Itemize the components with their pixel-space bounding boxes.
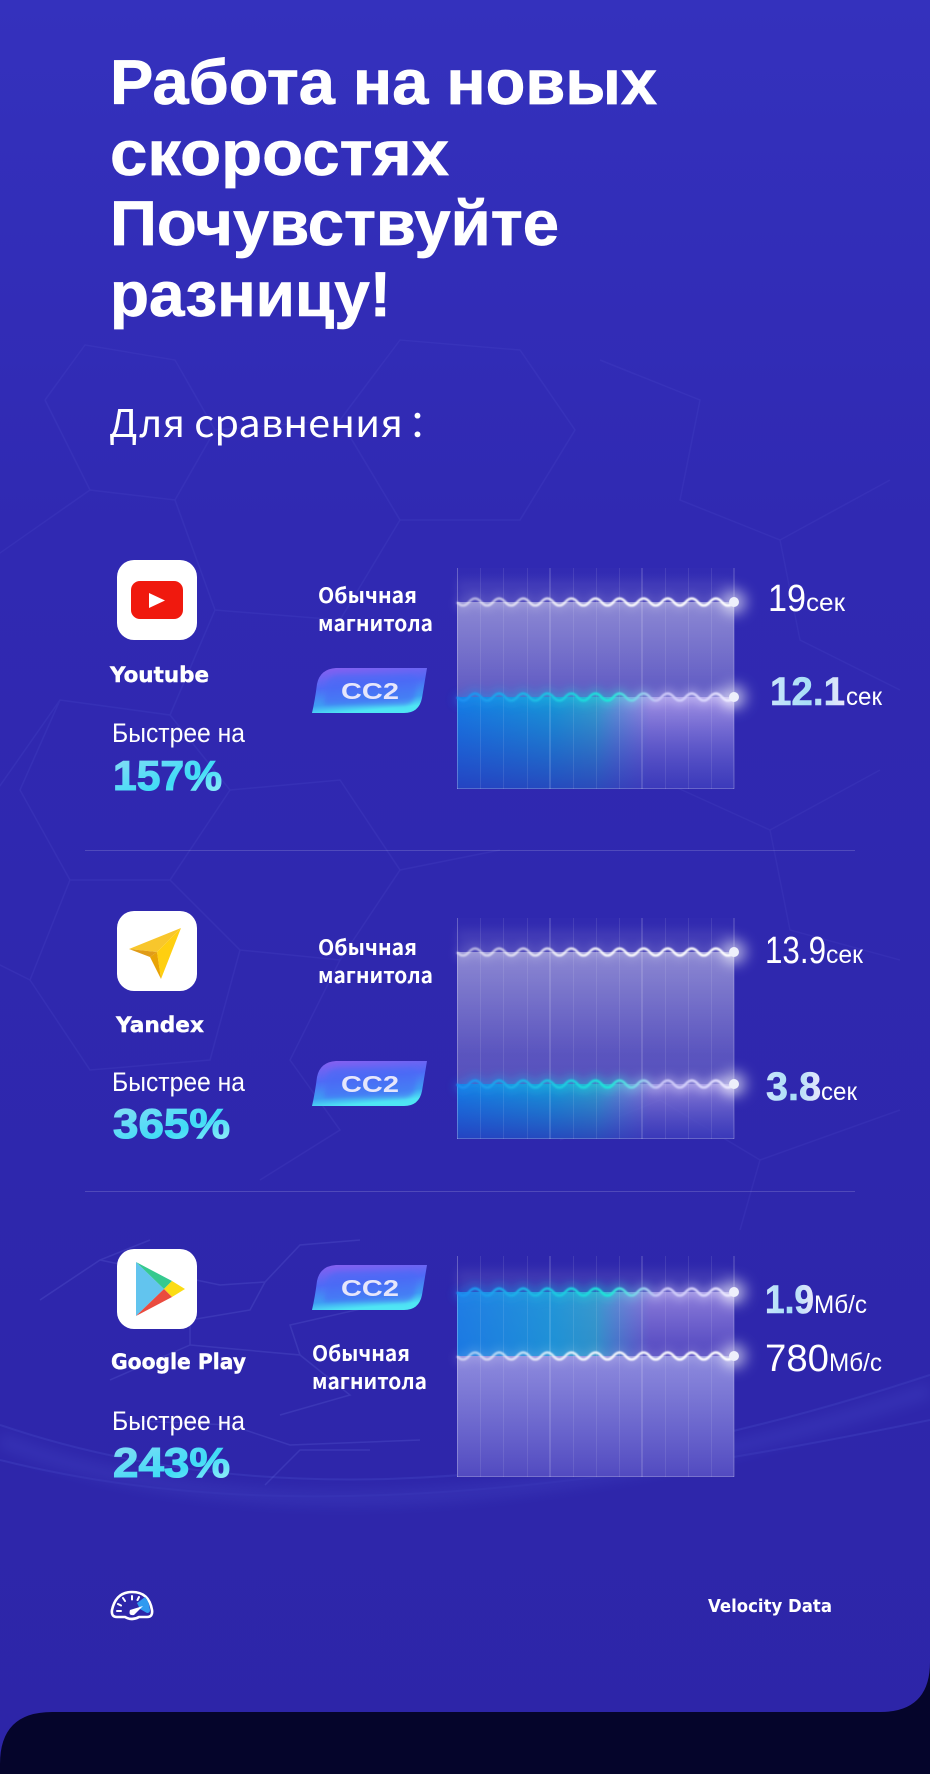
title bbox=[110, 48, 657, 330]
label: regular head unit: магнитола bbox=[318, 608, 433, 638]
value: regular: 13.9 bbox=[765, 930, 826, 972]
value: regular bbox=[765, 1338, 882, 1380]
value: CC2 bbox=[765, 1278, 867, 1322]
value: regular: Мб/с bbox=[829, 1349, 882, 1377]
label: regular head unit: магнитола bbox=[318, 960, 433, 990]
panel: yandex bbox=[112, 911, 864, 1147]
value: CC2: сек bbox=[821, 1078, 858, 1106]
badge: CC2: CC2 bbox=[341, 1275, 399, 1301]
faster label: Быстрее на bbox=[112, 1067, 246, 1097]
brand text: Velocity Data bbox=[708, 1596, 832, 1617]
chart: youtube bbox=[457, 568, 746, 789]
icon: google play bbox=[117, 1249, 197, 1329]
badge: CC2: CC2 bbox=[341, 1071, 399, 1097]
icon: yandex bbox=[117, 911, 197, 991]
percentage: 243% bbox=[113, 1439, 230, 1486]
background hexagon network bbox=[0, 340, 900, 1230]
badge: CC2: CC2 bbox=[341, 678, 399, 704]
icon: youtube bbox=[117, 560, 197, 640]
label: regular head unit: Обычная bbox=[312, 1338, 410, 1368]
app name: Yandex bbox=[115, 1013, 204, 1037]
value: CC2 bbox=[766, 1065, 858, 1109]
value: regular: сек bbox=[826, 941, 864, 969]
value: CC2: 12.1 bbox=[770, 670, 845, 714]
value: CC2: сек bbox=[846, 683, 883, 711]
badge: CC2 bbox=[312, 1061, 427, 1106]
value: regular: 19 bbox=[768, 578, 806, 620]
label: regular head unit bbox=[318, 580, 433, 638]
value: CC2 bbox=[770, 670, 883, 714]
title: Почувствуйте bbox=[110, 189, 559, 259]
value: CC2: 1.9 bbox=[765, 1278, 814, 1322]
chart: yandex bbox=[457, 918, 746, 1139]
label: regular head unit: магнитола bbox=[312, 1366, 427, 1396]
value: CC2: Мб/с bbox=[814, 1291, 867, 1319]
label: regular head unit bbox=[312, 1338, 427, 1396]
dark footer band bbox=[0, 1650, 930, 1774]
label: regular head unit bbox=[318, 932, 433, 990]
app name: Youtube bbox=[109, 663, 209, 687]
panel: youtube bbox=[109, 560, 883, 799]
app name: Google Play bbox=[111, 1350, 246, 1374]
faster label: Быстрее на bbox=[112, 1406, 246, 1436]
value: regular: сек bbox=[806, 589, 846, 617]
percentage: 365% bbox=[113, 1100, 230, 1147]
panel: google play bbox=[111, 1249, 882, 1486]
value: CC2: 3.8 bbox=[766, 1065, 821, 1109]
subtitle: ： bbox=[408, 393, 446, 448]
background swoosh bbox=[0, 1375, 930, 1498]
title: Работа на новых bbox=[110, 48, 657, 118]
percentage: 157% bbox=[113, 752, 222, 799]
divider bbox=[85, 1191, 855, 1192]
title: скоростях bbox=[110, 119, 449, 189]
value: regular bbox=[768, 578, 846, 620]
value: regular: 780 bbox=[765, 1338, 829, 1380]
title: разницу! bbox=[110, 260, 391, 330]
faster label: Быстрее на bbox=[112, 718, 246, 748]
badge: CC2 bbox=[312, 1265, 427, 1310]
subtitle: Для сравнения bbox=[109, 393, 403, 448]
label: regular head unit: Обычная bbox=[318, 580, 417, 610]
chart: google play bbox=[457, 1256, 746, 1477]
badge: CC2 bbox=[312, 668, 427, 713]
divider bbox=[85, 850, 855, 851]
label: regular head unit: Обычная bbox=[318, 932, 417, 962]
icon: speedometer bbox=[112, 1592, 152, 1619]
